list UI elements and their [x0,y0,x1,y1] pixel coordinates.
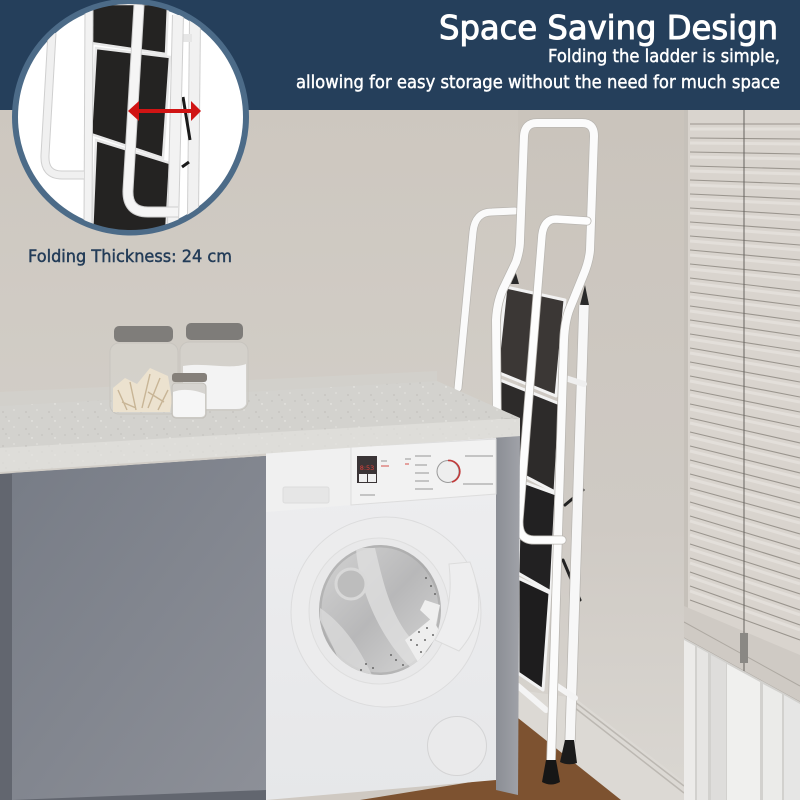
door ring [291,517,481,707]
title: Space Saving Design [439,8,778,47]
step panels [497,287,565,690]
lower bars [518,686,575,710]
skirting board [518,690,684,800]
struts [182,97,190,167]
drum [319,545,441,675]
front tube [128,5,178,212]
tall frame [496,123,594,762]
jar: small [172,373,207,418]
header band [0,0,800,110]
blind slats [690,124,800,640]
rear rail [570,305,584,742]
control panel [351,439,496,505]
side post [496,434,520,795]
display: 8:53 [360,464,374,472]
blind slat highlights [690,129,800,630]
side rail left [88,10,89,225]
drawer [266,447,351,512]
floor [360,712,622,800]
foot left [542,760,560,784]
foot right [560,740,577,764]
door inner ring [309,538,449,684]
brackets [511,270,519,284]
jar: powder [180,323,248,410]
subtitle line 2: allowing for easy storage without the need for much space [296,73,780,93]
inset circle [15,2,246,235]
double arrow: folding thickness [128,101,201,121]
door handle [435,562,479,651]
black panels [91,4,170,235]
wainscot panels [684,638,800,800]
cross bar [562,377,584,384]
window blind [684,110,800,710]
drawer handle [283,487,329,503]
blind bottom rail [684,606,800,702]
counter top [0,381,520,472]
service hatch [428,716,486,776]
rear tube [193,20,195,215]
dial [437,460,460,482]
ladder [458,123,594,784]
subtitle line 1: Folding the ladder is simple, [548,47,780,67]
side rail right [173,15,178,225]
jar: clothes pegs [110,326,178,414]
connector [184,34,192,42]
blind cord [744,110,745,672]
front hand rail [519,219,587,540]
folding thickness label: Folding Thickness: 24 cm [28,247,232,266]
panel labels [360,456,493,495]
rear struts [563,490,583,600]
left wall [0,110,519,510]
cord tassel [740,633,748,663]
display [357,456,377,483]
washing machine [266,438,496,800]
machine body [266,438,496,800]
right wall [518,110,685,800]
backsplash strip [0,371,437,406]
left hand rail [458,211,515,388]
cabinet [0,456,266,800]
left tube [45,33,84,175]
